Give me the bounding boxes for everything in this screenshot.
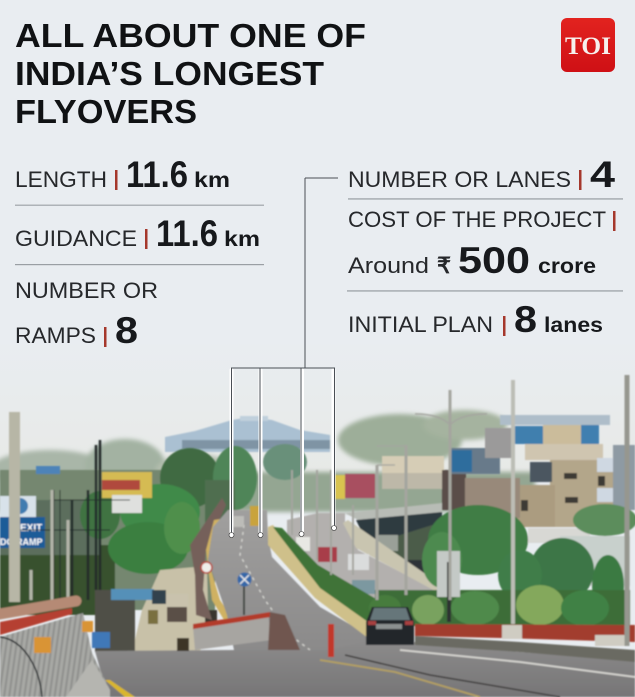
distant hazy trees <box>0 410 535 512</box>
stat: length: 11.6 <box>126 154 188 195</box>
photo: flyover street scene <box>0 340 635 697</box>
stat: number of ramps <box>15 278 158 351</box>
dome building <box>165 416 330 452</box>
stat: number of ramps: NUMBER OR <box>15 278 158 303</box>
stat: initial plan: INITIAL PLAN <box>348 312 493 337</box>
stat: cost of the project: 500 <box>458 240 530 281</box>
foreground road <box>95 640 635 697</box>
signs and banners left <box>102 472 152 498</box>
tall left pole <box>9 412 20 602</box>
TOI logo: TOI <box>565 33 611 60</box>
stat: number of ramps: RAMPS <box>15 323 96 348</box>
road lines <box>400 650 635 677</box>
stat: number of lanes: NUMBER OR LANES <box>348 167 571 192</box>
left trees and street clutter <box>0 444 307 615</box>
small vehicles on flyover <box>233 506 375 594</box>
stat: cost of the project: COST OF THE PROJECT <box>348 207 606 232</box>
distant buildings right <box>382 456 444 476</box>
ramp parapet <box>343 520 437 592</box>
title: INDIA’S LONGEST <box>15 55 324 92</box>
stat: guidance: km <box>224 228 260 251</box>
second carriageway <box>287 513 435 602</box>
side street <box>132 566 208 652</box>
stat: number of lanes: 4 <box>590 154 616 195</box>
street light poles <box>292 375 627 646</box>
title <box>15 17 366 130</box>
exit ramp sign <box>0 517 45 548</box>
flyover hedge <box>273 527 378 622</box>
black car <box>366 607 414 645</box>
stat: initial plan <box>348 299 603 340</box>
exit ramp sign: EXIT <box>20 523 42 534</box>
stat: guidance: GUIDANCE <box>15 226 137 251</box>
overpass deck <box>345 503 442 520</box>
stat: length: km <box>194 169 230 192</box>
stat: initial plan: 8 <box>514 299 537 340</box>
stat: length <box>15 154 230 195</box>
red barrier <box>415 624 635 642</box>
foreground left barrier <box>0 601 110 697</box>
road sign: speed limit <box>201 562 212 573</box>
leader lines to flyover <box>229 178 338 538</box>
white building lower right <box>528 528 590 543</box>
stat: number of lanes <box>348 154 616 195</box>
stat: length: LENGTH <box>15 167 107 192</box>
stat: cost of the project: crore <box>538 255 596 278</box>
stat: cost of the project: Around <box>348 253 429 278</box>
stat: initial plan: lanes <box>544 314 603 337</box>
mid barrier <box>177 612 300 651</box>
TOI logo <box>561 18 615 72</box>
hedge <box>369 585 630 626</box>
right kerb of flyover <box>268 525 368 638</box>
lane markings <box>240 525 310 650</box>
right trees <box>422 504 635 615</box>
stat: cost of the project: ₹ <box>437 253 451 278</box>
red bollard <box>328 624 334 657</box>
blue and tan buildings <box>450 415 635 527</box>
kerb <box>415 636 635 662</box>
title: FLYOVERS <box>15 93 197 130</box>
stat: number of ramps: 8 <box>115 310 138 351</box>
stat: guidance: 11.6 <box>156 213 218 254</box>
road sign: blue round <box>238 572 252 615</box>
truck <box>166 594 188 622</box>
street sign panel <box>437 551 460 597</box>
exit ramp sign: DO RAMP <box>0 537 42 547</box>
left kerb and chevrons <box>190 498 226 620</box>
title: ALL ABOUT ONE OF <box>15 17 366 54</box>
stat: cost of the project <box>348 207 616 281</box>
stat: guidance <box>15 213 260 254</box>
main flyover road <box>208 510 370 655</box>
